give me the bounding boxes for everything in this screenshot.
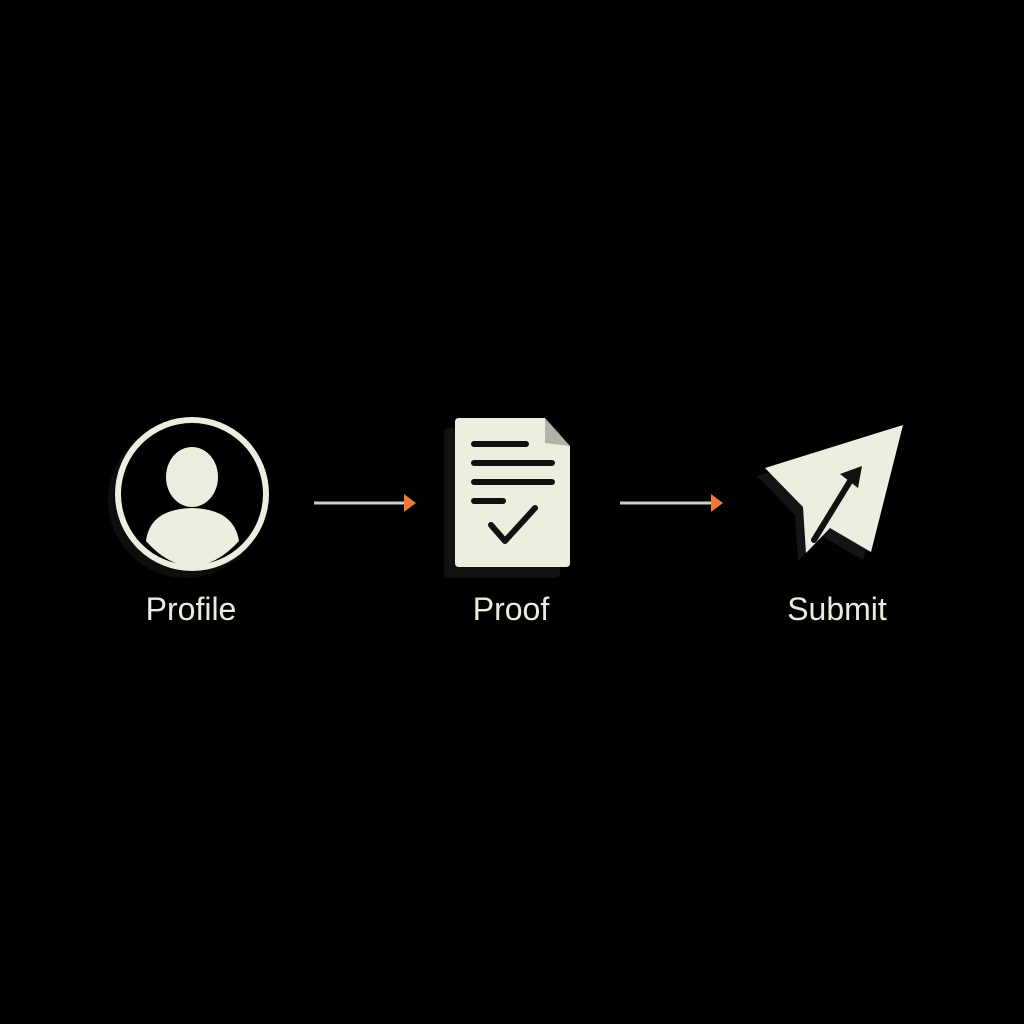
icon: proof document <box>444 418 570 578</box>
icon: profile <box>108 420 266 578</box>
label: Submit: Submit <box>787 591 887 627</box>
icon: submit paper plane <box>757 425 903 561</box>
arrow: profile to proof <box>314 494 416 512</box>
label: Proof: Proof <box>473 591 549 627</box>
label: Profile: Profile <box>146 591 236 627</box>
arrow: proof to submit <box>620 494 723 512</box>
